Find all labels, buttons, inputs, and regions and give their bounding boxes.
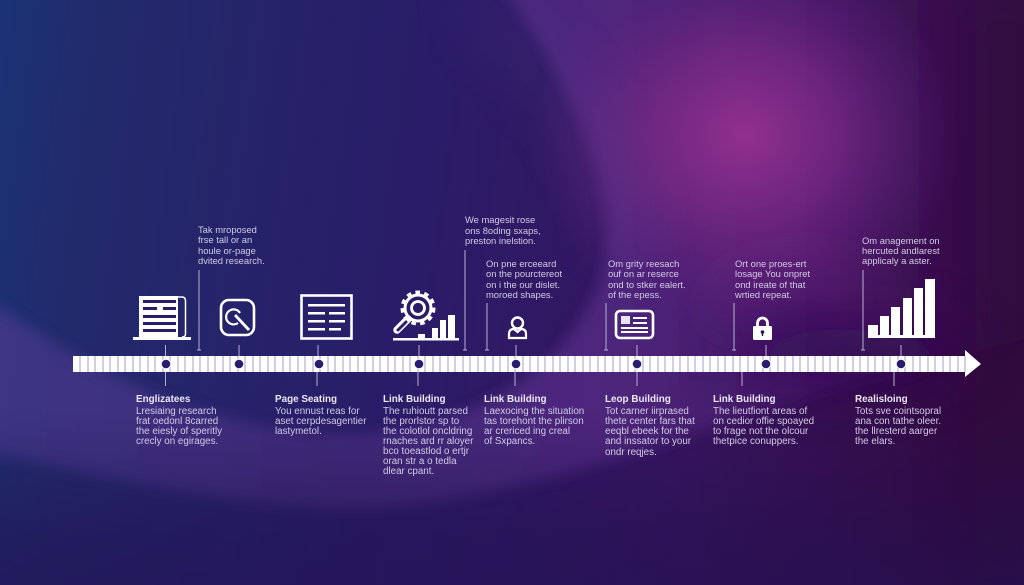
upper note 2: ons 8oding sxaps, [465, 225, 541, 236]
upper note 4: Om grity reesach [608, 258, 679, 269]
upper note 5: wrtied repeat. [734, 289, 792, 300]
lower column 6: on cedior offie spoayed [713, 416, 814, 427]
lower column 3: dlear cpant. [383, 466, 434, 477]
lower column 1: the eiesly of speritly [136, 426, 222, 437]
lower column 2 [275, 394, 367, 437]
icon: padlock [753, 318, 772, 340]
lower column 5: eeqbl ebeek for the [605, 426, 689, 437]
lower column 3: bco toeastlod o ertjr [383, 446, 470, 457]
upper note 6: applicaly a aster. [862, 255, 932, 266]
timeline connector lines [166, 345, 901, 386]
lower column 5: ondr reqjes. [605, 447, 657, 458]
upper note 2: preston inelstion. [465, 235, 536, 246]
lower column 5: thete center fars that [605, 416, 695, 427]
lower column 2: lastymetol. [275, 426, 322, 437]
lower column 7: ana con tathe oleer. [855, 416, 941, 427]
timeline milestone dots [161, 359, 906, 369]
upper note 4: of the epess. [608, 289, 662, 300]
upper note 3: on the pourctereot [486, 268, 562, 279]
lower column 6: The lieutfiont areas of [713, 406, 807, 417]
lower column 7: the llresterd aarger [855, 426, 938, 437]
icon: id card [616, 311, 653, 338]
lower column 1: crecly on egirages. [136, 436, 218, 447]
upper note 5: ond ireate of that [735, 279, 806, 290]
icon: rising bar chart [868, 279, 935, 338]
upper note 1: dvited research. [198, 255, 265, 266]
lower column 5: Tot carner iirprased [605, 406, 689, 417]
lower column 3: The ruhioutt parsed [383, 406, 468, 417]
upper note 6: hercuted andlarest [862, 245, 940, 256]
upper annotation leader lines [197, 250, 865, 350]
lower column 7: Tots sve cointsopral [855, 406, 941, 417]
lower column 1: frat oedonl 8carred [136, 416, 218, 427]
upper note 5: Ort one proes-ert [735, 258, 807, 269]
lower column 1 [136, 394, 222, 447]
upper note 2 [465, 214, 541, 246]
lower column 7: Realisloing [855, 394, 908, 405]
lower column 3: oran str a o tedla [383, 456, 457, 467]
upper note 4: ond to stker ealert. [608, 279, 686, 290]
lower column 4: Link Building [484, 394, 547, 405]
icon: person [509, 318, 526, 338]
icon: text panel [302, 296, 352, 338]
upper note 3: moroed shapes. [486, 289, 553, 300]
lower column 3: rnaches ard rr aloyer [383, 436, 474, 447]
lower column 4: Laexocing the situation [484, 406, 584, 417]
timeline arrow [73, 350, 981, 377]
upper note 4: ouf on ar reserce [608, 268, 679, 279]
lower column 6: thetpice conuppers. [713, 436, 799, 447]
upper note 1: Tak mroposed [198, 224, 257, 235]
upper note 1 [198, 224, 265, 266]
lower column 7: the elars. [855, 436, 895, 447]
lower column 3: the prorlstor sp to [383, 416, 460, 427]
lower column 2: You ennust reas for [275, 406, 360, 417]
lower column 4: ar crericed ing creal [484, 426, 570, 437]
lower column 1: Lresiaing research [136, 406, 217, 417]
lower column 5 [605, 394, 695, 458]
upper note 3: On pne erceeard [486, 258, 556, 269]
lower column 2: Page Seating [275, 394, 337, 405]
lower column 2: aset cerpdesagentier [275, 416, 367, 427]
upper note 6 [862, 235, 940, 266]
lower column 5: Leop Building [605, 394, 671, 405]
lower column 1: Englizatees [136, 394, 191, 405]
upper note 5 [734, 258, 810, 300]
upper note 1: houle or-page [198, 245, 256, 256]
upper note 6: Om anagement on [862, 235, 940, 246]
lower column 7 [855, 394, 941, 447]
lower column 4: tas torehont the plirson [484, 416, 584, 427]
lower column 6: to frage not the olcour [713, 426, 809, 437]
lower column 4: of Sxpancs. [484, 436, 535, 447]
upper note 5: losage You onpret [735, 268, 810, 279]
icon: document on laptop [133, 296, 191, 340]
lower column 6 [713, 394, 814, 447]
upper note 3: on i the our dislet. [486, 279, 560, 290]
lower column 5: and inssator to your [605, 436, 692, 447]
upper note 3 [486, 258, 562, 300]
upper note 1: frse tall or an [198, 234, 252, 245]
lower column 3 [383, 394, 474, 477]
upper note 2: We magesit rose [465, 214, 535, 225]
icon: gear, magnifier and bars [393, 292, 459, 340]
upper note 4 [608, 258, 686, 300]
lower column 6: Link Building [713, 394, 776, 405]
icon: magnifier [221, 300, 254, 335]
lower column 3: the colotlol oncldring [383, 426, 472, 437]
lower column 4 [484, 394, 584, 447]
lower column 3: Link Building [383, 394, 446, 405]
